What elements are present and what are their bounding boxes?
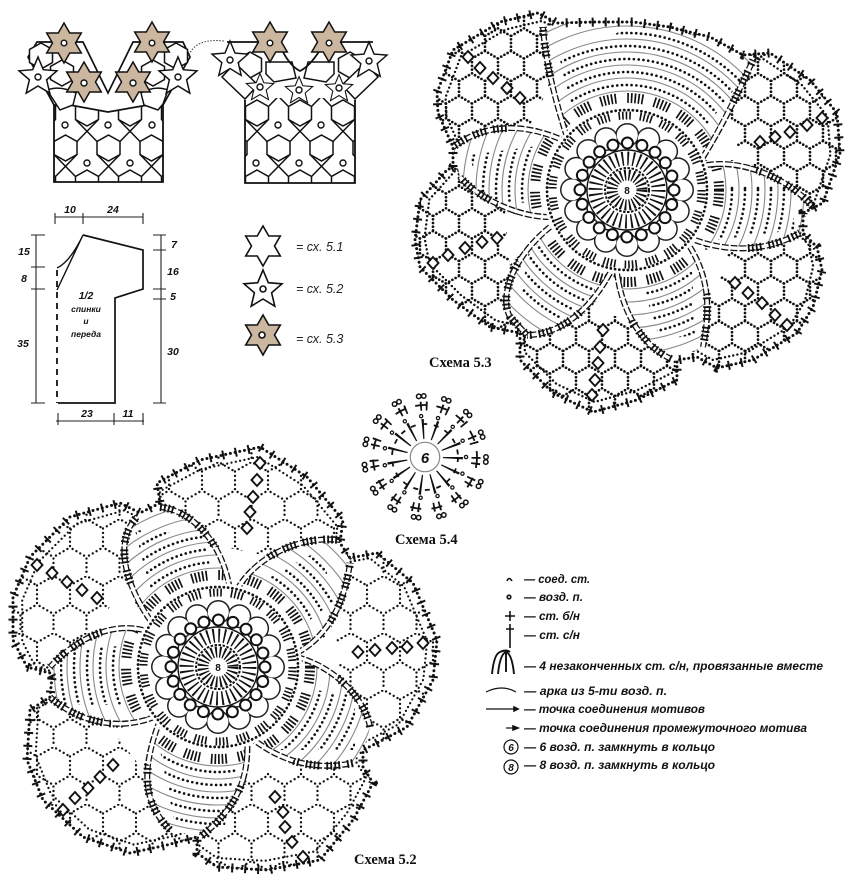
pattern schematic with dimensions: [17, 204, 179, 425]
pattern schematic with dimensions: 11: [123, 408, 134, 420]
heading: scheme 5.3: Схема 5.3: [429, 355, 492, 371]
star legend: [244, 226, 343, 355]
symbol legend: — точка соединения мотивов: [523, 704, 705, 716]
doily chart: scheme 5.3: [415, 0, 840, 412]
pattern schematic with dimensions: 8: [21, 273, 27, 285]
pattern schematic with dimensions: 15: [18, 246, 30, 258]
pattern schematic with dimensions: переда: [71, 329, 101, 339]
pattern schematic with dimensions: 10: [64, 204, 76, 216]
star legend: = сх. 5.3: [296, 332, 343, 346]
symbol legend: — ст. с/н: [523, 630, 580, 642]
pattern schematic with dimensions: 35: [17, 338, 29, 350]
pattern schematic with dimensions: 24: [106, 204, 119, 216]
symbol legend: — точка соединения промежуточного мотива: [523, 723, 808, 735]
heading: scheme 5.2: Схема 5.2: [354, 852, 417, 868]
pattern schematic with dimensions: 30: [167, 346, 179, 358]
doily chart: scheme 5.3: 8: [624, 186, 630, 197]
symbol legend: — 8 возд. п. замкнуть в кольцо: [523, 760, 715, 772]
star legend: = сх. 5.1: [296, 240, 343, 254]
symbol legend: — арка из 5-ти возд. п.: [523, 686, 667, 698]
pattern schematic with dimensions: и: [83, 316, 89, 326]
symbol legend: — соед. ст.: [523, 574, 590, 586]
pattern schematic with dimensions: 1/2: [79, 290, 93, 302]
pattern schematic with dimensions: спинки: [71, 304, 102, 314]
symbol legend: 6: [508, 743, 514, 754]
doily chart: scheme 5.2: 8: [215, 663, 221, 674]
pattern schematic with dimensions: 7: [171, 239, 178, 251]
arrow between garments: [189, 41, 224, 55]
symbol legend: — ст. б/н: [523, 611, 580, 623]
pattern schematic with dimensions: 23: [80, 408, 93, 420]
symbol legend: — 4 незаконченных ст. с/н, провязанные вместе: [523, 661, 824, 673]
symbol legend: 8: [508, 763, 514, 774]
heading: scheme 5.4: Схема 5.4: [395, 532, 458, 548]
garment diagram: front: [19, 22, 197, 182]
symbol legend: — 6 возд. п. замкнуть в кольцо: [523, 742, 715, 754]
garment diagram: back: [212, 22, 387, 183]
symbol legend: — возд. п.: [523, 592, 583, 604]
star legend: = сх. 5.2: [296, 282, 343, 296]
doily chart: scheme 5.2: [13, 447, 437, 870]
doily chart: scheme 5.4: [364, 396, 486, 518]
pattern schematic with dimensions: 5: [170, 291, 176, 303]
doily chart: scheme 5.4: 6: [421, 450, 430, 467]
pattern schematic with dimensions: 16: [167, 266, 179, 278]
symbol legend: [486, 574, 824, 774]
